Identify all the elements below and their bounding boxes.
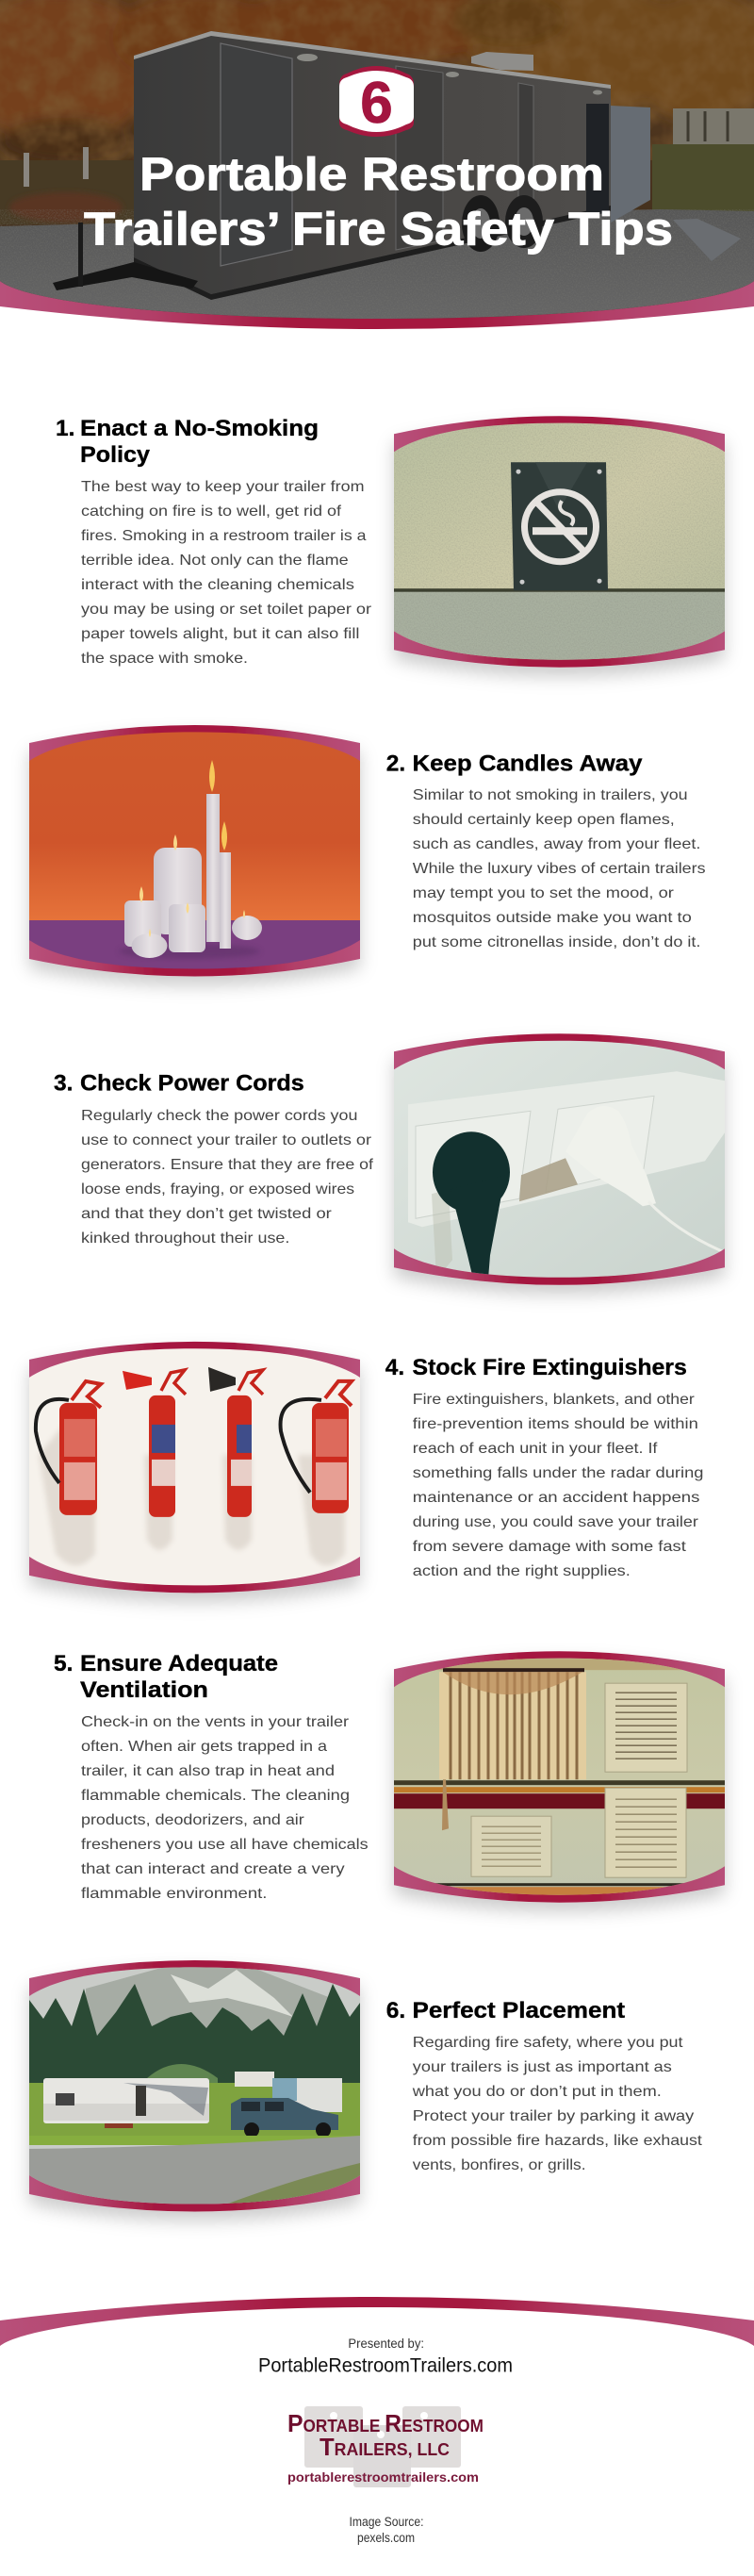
text block: tip 4: during use, you could save your trailer: [413, 1514, 699, 1530]
heading: tip 5: [54, 1651, 278, 1703]
number badge: 6: [360, 71, 393, 136]
text block: tip 2: may tempt you to set the mood, or: [413, 885, 675, 901]
text block: tip 2: Similar to not smoking in trailers, you: [413, 787, 688, 803]
text block: tip 5: fresheners you use all have chemicals: [81, 1837, 369, 1853]
heading: tip 5: 5.: [54, 1651, 73, 1676]
title: Portable Restroom: [139, 150, 604, 201]
heading: tip 2: 2.: [386, 751, 405, 777]
heading: tip 1: Enact a No-Smoking: [80, 416, 319, 441]
text block: tip 3: loose ends, fraying, or exposed wires: [81, 1181, 354, 1197]
extinguisher D: [281, 1381, 352, 1513]
text block: tip 6: your trailers is just as important as: [413, 2059, 672, 2075]
panel: tip 2 candles: [29, 725, 705, 977]
heading: tip 1: Policy: [80, 442, 150, 468]
text block: tip 6: vents, bonfires, or grills.: [413, 2157, 586, 2173]
logo: Portable Restroom Trailers LLC: TRAILERS, LLC: [320, 2433, 450, 2461]
text block: tip 1: the space with smoke.: [81, 651, 248, 667]
text block: tip 4: action and the right supplies.: [413, 1563, 631, 1579]
text block: tip 6: [412, 2035, 702, 2173]
text block: tip 4: maintenance or an accident happens: [413, 1490, 699, 1506]
panel: tip 6 placement: [29, 1960, 702, 2212]
extinguisher C: [208, 1367, 263, 1517]
heading: tip 6: Perfect Placement: [413, 1998, 625, 2023]
footer: image source: pexels.com: [357, 2531, 415, 2545]
text block: tip 5: flammable environment.: [81, 1886, 267, 1902]
text block: tip 3: [81, 1108, 374, 1247]
footer: image source: Image Source:: [349, 2515, 424, 2529]
text block: tip 3: Regularly check the power cords you: [81, 1108, 357, 1124]
text block: tip 2: mosquitos outside make you want to: [413, 910, 692, 926]
text block: tip 2: put some citronellas inside, don’t do it.: [413, 934, 700, 950]
text block: tip 1: [81, 479, 372, 667]
text block: tip 1: you may be using or set toilet paper or: [81, 602, 372, 618]
title: Trailers’ Fire Safety Tips: [84, 204, 673, 255]
text block: tip 6: Protect your trailer by parking it away: [413, 2108, 694, 2124]
text block: tip 2: such as candles, away from your fleet.: [413, 836, 700, 852]
heading: tip 2: Keep Candles Away: [413, 751, 643, 777]
text block: tip 1: The best way to keep your trailer from: [81, 479, 364, 495]
header photo: trailer in autumn park: [0, 0, 754, 321]
footer band: [0, 2297, 754, 2346]
footer: image source: [349, 2515, 424, 2545]
title: [84, 150, 673, 255]
text block: tip 3: use to connect your trailer to outlets or: [81, 1132, 372, 1148]
heading: tip 5: Ensure Adequate: [80, 1651, 278, 1676]
text block: tip 5: Check-in on the vents in your trailer: [81, 1714, 350, 1730]
text block: tip 5: products, deodorizers, and air: [81, 1812, 304, 1828]
photo: campground with RV and truck: [29, 1960, 360, 2212]
text block: tip 2: While the luxury vibes of certain trailers: [413, 861, 705, 877]
text block: tip 5: that can interact and create a very: [81, 1861, 345, 1877]
heading: tip 3: 3.: [54, 1071, 73, 1097]
extinguisher A: [36, 1381, 101, 1515]
photo: candles: [29, 725, 360, 977]
footer: presented by: [258, 2337, 513, 2377]
number badge: [339, 66, 414, 137]
panel: tip 4 fire extinguishers: [29, 1342, 703, 1593]
heading: tip 6: 6.: [386, 1998, 405, 2023]
panel: tip 3 power cords: [54, 1033, 725, 1285]
trailer: [53, 31, 741, 300]
logo: Portable Restroom Trailers LLC: PORTABLE RESTROOM: [287, 2409, 484, 2437]
text block: tip 6: Regarding fire safety, where you put: [413, 2035, 683, 2051]
text block: tip 4: reach of each unit in your fleet. If: [413, 1441, 658, 1457]
text block: tip 5: trailer, it can also trap in heat and: [81, 1763, 335, 1779]
text block: tip 1: catching on fire is to well, get rid of: [81, 504, 342, 520]
photo: no smoking sign: [394, 416, 725, 668]
text block: tip 1: terrible idea. Not only can the flame: [81, 553, 349, 569]
panel: tip 1 no smoking: [56, 416, 725, 668]
text block: tip 4: Fire extinguishers, blankets, and other: [413, 1392, 696, 1408]
text block: tip 5: flammable chemicals. The cleaning: [81, 1788, 350, 1804]
text block: tip 3: and that they don’t get twisted or: [81, 1206, 333, 1222]
text block: tip 6: what you do or don’t put in them.: [412, 2084, 662, 2100]
text block: tip 1: interact with the cleaning chemicals: [81, 577, 354, 593]
text block: tip 4: [413, 1392, 703, 1579]
text block: tip 1: fires. Smoking in a restroom trailer is a: [81, 528, 367, 544]
text block: tip 3: generators. Ensure that they are free of: [81, 1157, 374, 1173]
footer: presented by: Presented by:: [348, 2337, 424, 2351]
heading: tip 1: [56, 416, 319, 468]
extinguisher B: [123, 1370, 186, 1517]
logo: Portable Restroom Trailers LLC: portablerestroomtrailers.com: [287, 2469, 479, 2485]
text block: tip 3: kinked throughout their use.: [81, 1230, 289, 1247]
heading: tip 3: Check Power Cords: [80, 1071, 304, 1097]
text block: tip 1: paper towels alight, but it can also fill: [81, 626, 359, 642]
photo: power outlets and plugs: [394, 1033, 725, 1285]
logo: Portable Restroom Trailers LLC: [287, 2406, 484, 2487]
text block: tip 6: from possible fire hazards, like exhaust: [413, 2133, 702, 2149]
photo: trailer vents and curtain: [394, 1651, 725, 1903]
text block: tip 5: often. When air gets trapped in a: [81, 1739, 327, 1755]
text block: tip 4: something falls under the radar during: [413, 1465, 703, 1481]
heading: tip 4: 4.: [385, 1355, 404, 1380]
text block: tip 4: fire-prevention items should be within: [413, 1416, 698, 1432]
heading: tip 5: Ventilation: [80, 1677, 208, 1703]
text block: tip 4: from severe damage with some fast: [413, 1539, 686, 1555]
panel: tip 5 ventilation: [54, 1651, 725, 1903]
text block: tip 5: [81, 1714, 369, 1902]
heading: tip 4: Stock Fire Extinguishers: [413, 1355, 687, 1380]
header band: [0, 273, 754, 329]
text block: tip 2: should certainly keep open flames,: [413, 812, 675, 828]
footer: presented by: PortableRestroomTrailers.com: [258, 2355, 513, 2377]
photo: fire extinguishers: [29, 1342, 360, 1593]
heading: tip 1: 1.: [56, 416, 74, 441]
text block: tip 2: [413, 787, 705, 950]
